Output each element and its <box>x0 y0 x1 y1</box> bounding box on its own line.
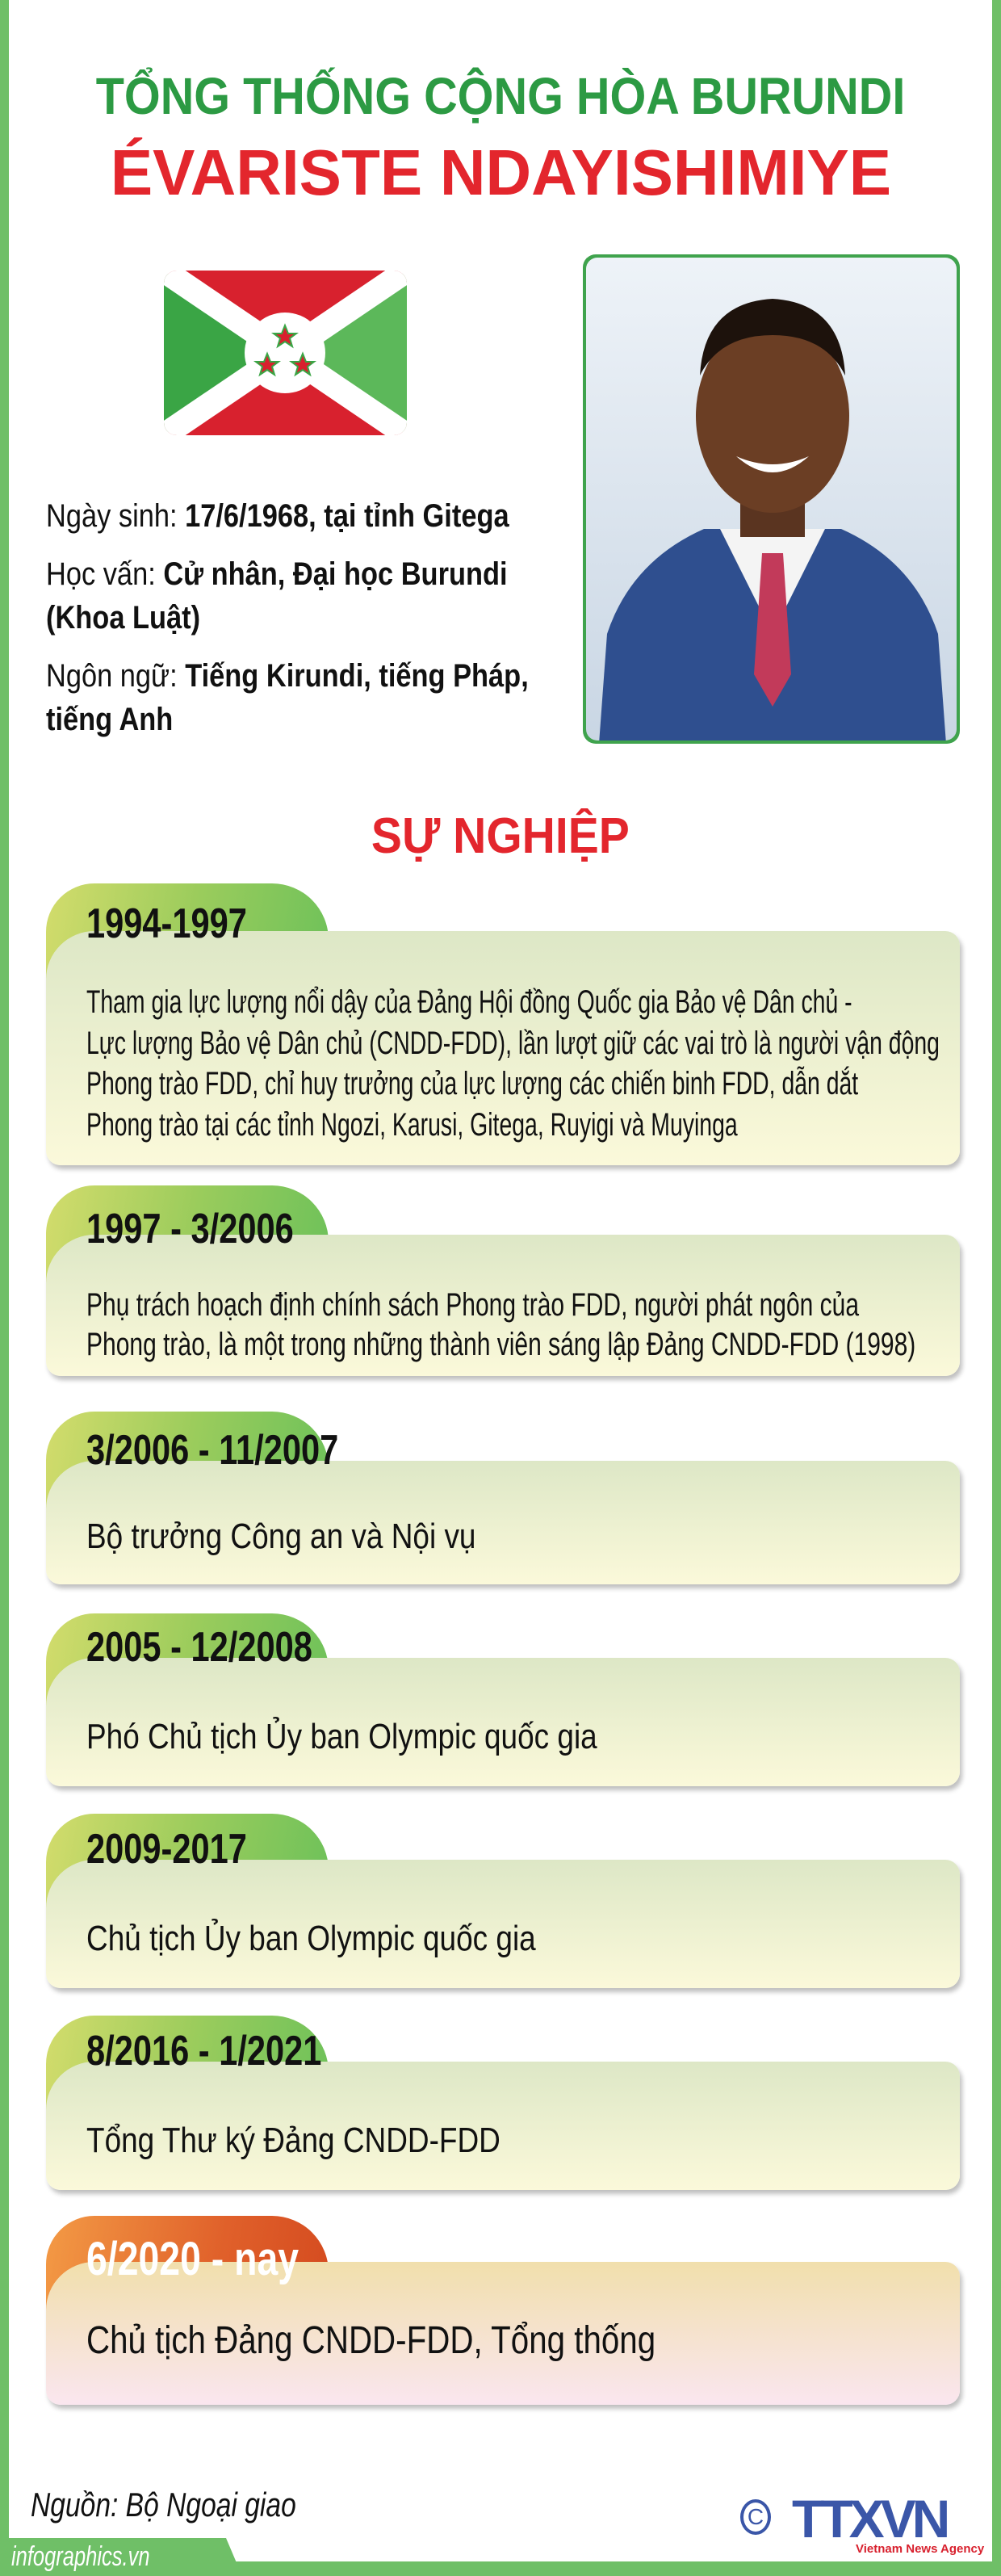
card text <box>86 1287 915 1362</box>
tab label: 2009-2017 <box>86 1826 247 1873</box>
logo: TTXVN: C <box>748 2504 764 2529</box>
card text: Lực lượng Bảo vệ Dân chủ (CNDD-FDD), lần lượt giữ các vai trò là người vận động <box>86 1026 940 1061</box>
tab label: 6/2020 - nay <box>86 2233 299 2285</box>
card: 3/2006-11/2007 <box>46 1412 965 1591</box>
title line 1: TỔNG THỐNG CỘNG HÒA BURUNDI <box>96 67 905 125</box>
card text: Tổng Thư ký Đảng CNDD-FDD <box>86 2121 500 2160</box>
tab label: 1994-1997 <box>86 900 247 947</box>
source note: Nguồn: Bộ Ngoại giao <box>31 2486 296 2524</box>
card: 6/2020-nay <box>46 2216 965 2411</box>
info: education: Học vấn: Cử nhân, Đại học Burundi <box>46 556 508 592</box>
footer tab: infographics.vn: infographics.vn <box>11 2541 150 2572</box>
tab label: 3/2006 - 11/2007 <box>86 1427 338 1474</box>
tab label: 1997 - 3/2006 <box>86 1206 294 1252</box>
card text: Phong trào tại các tỉnh Ngozi, Karusi, Gitega, Ruyigi và Muyinga <box>86 1106 738 1142</box>
info: birth: Ngày sinh: 17/6/1968, tại tỉnh Gitega <box>46 498 509 534</box>
card text: Phó Chủ tịch Ủy ban Olympic quốc gia <box>86 1717 597 1756</box>
card: 2005-12/2008 <box>46 1613 965 1793</box>
card text: Phong trào FDD, chỉ huy trưởng của lực lượng các chiến binh FDD, dẫn dắt <box>86 1066 858 1101</box>
title line 2: ÉVARISTE NDAYISHIMIYE <box>110 136 891 208</box>
card text: Chủ tịch Ủy ban Olympic quốc gia <box>86 1919 536 1958</box>
card: 8/2016-1/2021 <box>46 2016 965 2196</box>
icon: Burundi flag <box>164 271 407 435</box>
info: languages <box>46 658 529 737</box>
footer tab: infographics.vn <box>9 2538 236 2571</box>
logo: TTXVN <box>740 2489 985 2556</box>
card text: Bộ trưởng Công an và Nội vụ <box>86 1517 475 1556</box>
tab label: 8/2016 - 1/2021 <box>86 2028 321 2075</box>
card text: Phụ trách hoạch định chính sách Phong trào FDD, người phát ngôn của <box>86 1287 859 1323</box>
card text <box>86 984 940 1142</box>
card text: Chủ tịch Đảng CNDD-FDD, Tổng thống <box>86 2319 655 2362</box>
tab label: 2005 - 12/2008 <box>86 1624 312 1671</box>
info: education: (Khoa Luật) <box>46 600 200 636</box>
card text: Phong trào, là một trong những thành viên sáng lập Đảng CNDD-FDD (1998) <box>86 1327 915 1362</box>
card text: Tham gia lực lượng nổi dậy của Đảng Hội đồng Quốc gia Bảo vệ Dân chủ - <box>86 984 852 1020</box>
info: languages: Ngôn ngữ: Tiếng Kirundi, tiếng Pháp, <box>46 658 529 694</box>
card: 2009-2017 <box>46 1814 965 1995</box>
info: education <box>46 556 508 636</box>
heading: career: SỰ NGHIỆP <box>371 808 630 864</box>
card: 1997-3/2006 <box>46 1185 965 1382</box>
info: languages: tiếng Anh <box>46 702 173 737</box>
logo: TTXVN: TTXVN <box>792 2489 946 2549</box>
logo: TTXVN: Vietnam News Agency <box>856 2542 984 2556</box>
photo: portrait <box>583 254 960 744</box>
card: 1994-1997 <box>46 883 965 1172</box>
